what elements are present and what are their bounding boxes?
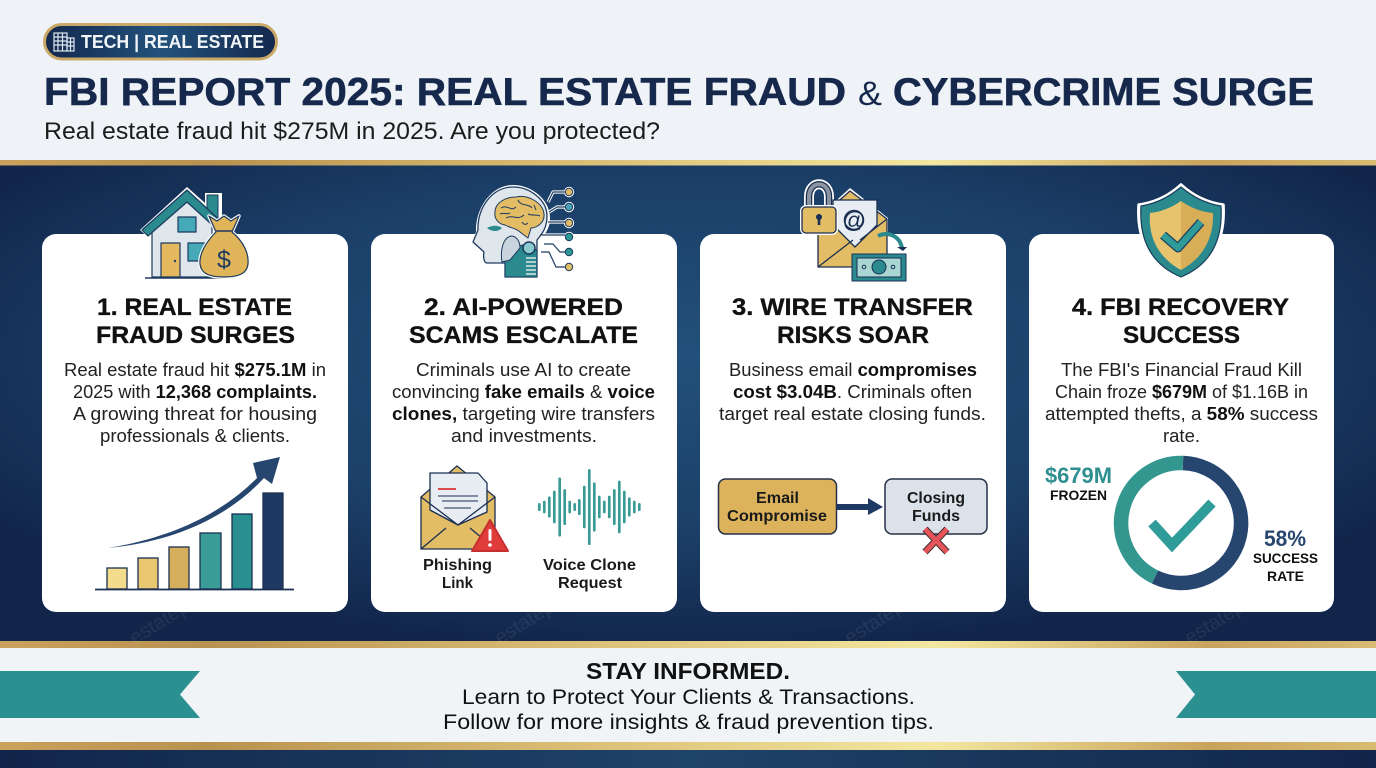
body text: attempted thefts, a 58% success [1045,404,1318,424]
title: CYBERCRIME SURGE [893,71,1314,114]
flow box: email compromise [718,479,836,534]
donut chart [1121,463,1241,583]
frozen stat: $679M [1045,463,1112,488]
frozen stat: FROZEN [1050,487,1107,503]
success rate stat: SUCCESS [1253,550,1318,566]
title: FBI REPORT 2025: REAL ESTATE FRAUD [44,71,846,114]
voice clone label: Voice Clone [543,557,636,574]
body text: professionals & clients. [100,426,290,446]
panel: fbi recovery success [1029,185,1334,612]
ribbon: left [0,671,200,718]
voice clone label: Request [558,575,623,592]
heading [409,294,638,349]
body text: and investments. [451,426,597,446]
body text: Real estate fraud hit $275.1M in [64,360,326,380]
check mark [1152,503,1212,545]
body text [64,360,326,446]
success rate stat [1253,526,1318,584]
phishing label [423,557,492,592]
frozen stat [1045,463,1112,503]
icon: red cross [925,529,947,552]
heading: FRAUD SURGES [96,322,295,349]
body text [719,360,986,424]
heading: 3. WIRE TRANSFER [732,294,973,321]
body text: clones, targeting wire transfers [392,404,655,424]
heading: 2. AI-POWERED [424,294,623,321]
footer call to action: STAY INFORMED. [586,658,790,684]
success rate stat: 58% [1264,526,1306,551]
body text: The FBI's Financial Fraud Kill [1061,360,1302,380]
arrow: rising trend [108,457,280,548]
icon: ai head [471,185,574,279]
footer call to action: Follow for more insights & fraud prevention tips. [443,711,934,734]
watermarks [126,579,1275,649]
body text: Chain froze $679M of $1.16B in [1055,382,1308,402]
voice clone label [543,557,636,592]
heading [96,294,295,349]
heading: 1. REAL ESTATE [97,294,292,321]
watermarks: estatepass [126,579,220,649]
footer background [0,647,1376,743]
body text: Criminals use AI to create [416,360,631,380]
watermarks: estatepass [841,579,935,649]
arrow: email to closing funds [837,498,883,515]
icon: voice waveform [539,470,639,544]
heading: 4. FBI RECOVERY [1072,294,1289,321]
flow box: closing funds: Funds [912,508,960,525]
flow box: email compromise: Compromise [727,508,827,525]
footer call to action: Learn to Protect Your Clients & Transactions. [462,686,915,709]
icon: lock, email and cash: @ [842,207,866,233]
phishing label: Phishing [423,557,492,574]
icon: lock, email and cash [802,184,907,281]
title: & [858,75,882,113]
success rate stat: RATE [1267,568,1304,584]
body text: A growing threat for housing [73,404,317,424]
icon: house and money bag [140,187,248,280]
body text: rate. [1163,426,1200,446]
icon: shield [1139,185,1223,279]
badge label: TECH | REAL ESTATE [81,32,264,52]
body text: Business email compromises [729,360,977,380]
bar chart [95,493,294,590]
flow box: email compromise: Email [756,490,799,507]
flow box: closing funds: Closing [907,490,965,507]
header background [0,0,1376,161]
watermarks: estatepass [491,579,585,649]
body text: convincing fake emails & voice [392,382,655,402]
subtitle: Real estate fraud hit $275M in 2025. Are you protected? [44,118,660,145]
icon: phishing email [421,466,508,551]
main navy band [0,165,1376,642]
heading [1072,294,1289,349]
phishing label: Link [442,575,473,592]
body text: 2025 with 12,368 complaints. [73,382,317,402]
icon: house and money bag: $ [217,246,231,274]
panel: ai-powered scams [371,185,677,612]
watermarks: estatepass [1181,579,1275,649]
heading [732,294,973,349]
ribbon: right [1176,671,1376,718]
icon: building [54,33,74,51]
heading: SUCCESS [1123,322,1240,349]
bottom navy strip [0,749,1376,768]
badge: tech real estate [44,24,276,59]
body text: cost $3.04B. Criminals often [733,382,972,402]
panel: wire transfer risks [700,184,1006,612]
body text [392,360,655,446]
body text: target real estate closing funds. [719,404,986,424]
title [44,71,1314,114]
heading: RISKS SOAR [777,322,929,349]
panel: real estate fraud surges [42,187,348,612]
flow box: closing funds [885,479,987,534]
footer call to action [443,658,934,734]
body text [1045,360,1318,446]
heading: SCAMS ESCALATE [409,322,638,349]
